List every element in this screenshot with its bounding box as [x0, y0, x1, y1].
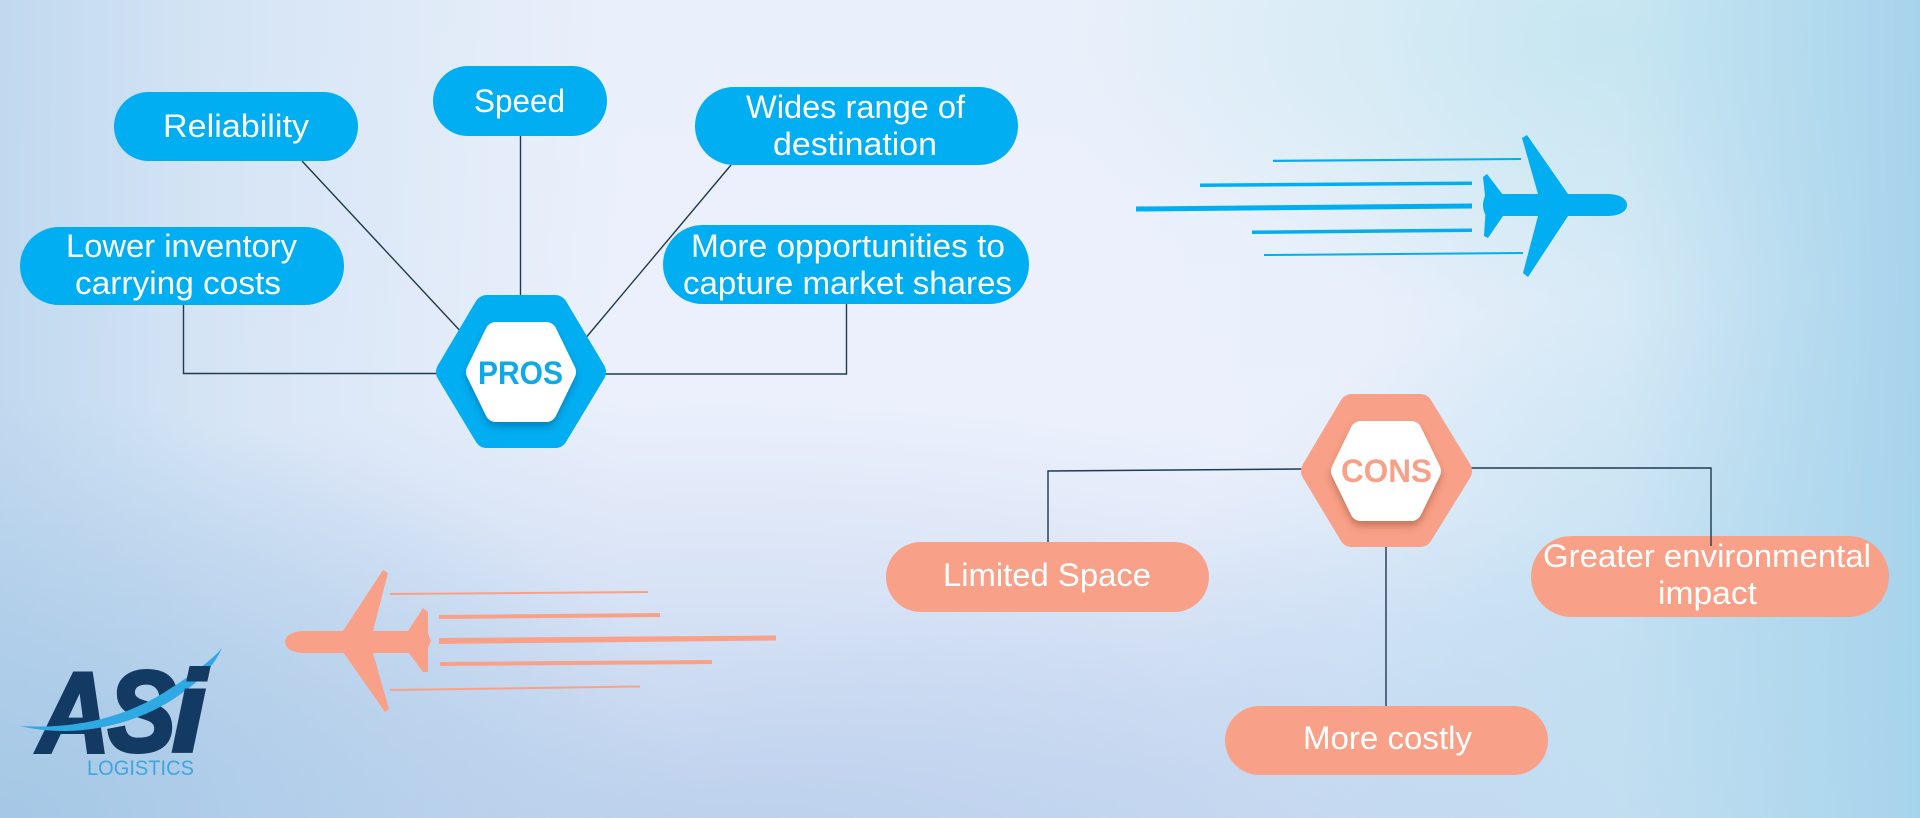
logo: ASI Logistics	[20, 648, 222, 780]
logo: ASI Logistics: i	[172, 649, 208, 776]
hexagon: PROS	[449, 308, 593, 435]
icon: orange airplane with speed lines	[285, 570, 776, 712]
panel: pros diagram	[20, 66, 1029, 435]
hexagon: CONS	[1314, 407, 1459, 534]
pill: Lower inventory carrying costs: Lower inventory	[66, 228, 297, 264]
logo: ASI Logistics: A	[35, 650, 110, 777]
pill: Speed: Speed	[474, 83, 565, 119]
pill: More opportunities to capture market shares: capture market shares	[683, 265, 1012, 301]
logo: ASI Logistics: LOGISTICS	[87, 757, 194, 780]
pill: More opportunities to capture market shares: More opportunities to	[691, 228, 1005, 264]
pill: Reliability	[114, 92, 358, 161]
connector lines: cons	[1048, 468, 1711, 706]
hexagon: PROS: PROS	[478, 355, 563, 391]
pill: Greater environmental impact: Greater environmental	[1543, 538, 1871, 574]
pill: More opportunities to capture market shares	[663, 225, 1029, 304]
pill: Lower inventory carrying costs: carrying costs	[75, 265, 281, 301]
pill: Speed	[433, 66, 607, 136]
pill: Wides range of destination: destination	[773, 126, 937, 162]
pill: Greater environmental impact	[1531, 536, 1889, 617]
icon: blue airplane with speed lines	[1136, 135, 1627, 277]
pill: Wides range of destination: Wides range of	[746, 89, 965, 125]
pill: More costly: More costly	[1303, 720, 1472, 756]
pill: Greater environmental impact: impact	[1658, 575, 1757, 611]
panel: cons diagram	[886, 407, 1889, 775]
connector lines: pros	[184, 136, 846, 374]
pill: Limited Space	[886, 542, 1209, 612]
pill: Lower inventory carrying costs	[20, 227, 344, 305]
hexagon: CONS: CONS	[1341, 453, 1432, 489]
pill: Wides range of destination	[695, 87, 1018, 165]
pill: Limited Space: Limited Space	[943, 557, 1151, 593]
logo: ASI Logistics: S	[108, 649, 176, 776]
pill: More costly	[1225, 706, 1548, 775]
pill: Reliability: Reliability	[163, 108, 309, 144]
